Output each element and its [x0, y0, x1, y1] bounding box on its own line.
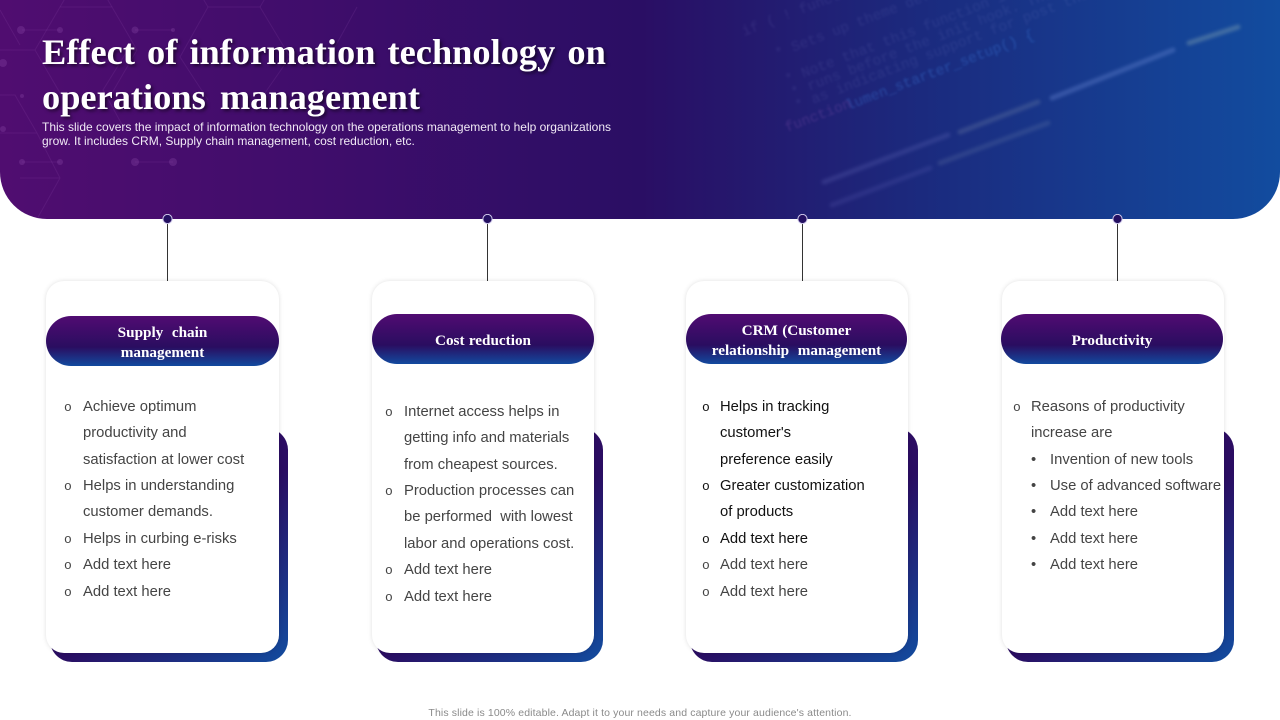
list: cost reduction points: Internet access helps in [404, 404, 559, 420]
list: productivity points: • [1031, 478, 1036, 494]
list: productivity points: Use of advanced software [1050, 478, 1221, 494]
list: supply chain points: o [64, 532, 72, 547]
blurred code backdrop [740, 0, 1242, 206]
heading: productivity: Productivity [1072, 332, 1152, 348]
list: cost reduction points: labor and operations cost. [404, 536, 574, 552]
list: cost reduction points [385, 404, 574, 605]
connector 3 [797, 214, 808, 281]
list: productivity points: Reasons of productivity [1031, 399, 1185, 415]
list: CRM points: Add text here [720, 557, 808, 573]
list: productivity points: Invention of new tools [1050, 452, 1193, 468]
panel: productivity [1000, 280, 1234, 662]
heading: CRM [686, 314, 907, 364]
title: Effect of information technology on [42, 32, 606, 72]
list: productivity points: • [1031, 452, 1036, 468]
list: CRM points: Greater customization [720, 478, 865, 494]
list: supply chain points: o [64, 558, 72, 573]
subtitle: This slide covers the impact of information technology on the operations management to help organizations [42, 120, 611, 134]
list: CRM points: o [702, 479, 710, 494]
list: productivity points: increase are [1031, 425, 1112, 441]
hexagon network pattern [0, 0, 357, 218]
heading: cost reduction [372, 314, 594, 364]
list: CRM points: o [702, 532, 710, 547]
list: supply chain points: o [64, 585, 72, 600]
list: cost reduction points: Production processes can [404, 483, 574, 499]
heading: CRM: relationship management [712, 342, 881, 358]
panel: CRM [684, 280, 918, 662]
panel: supply chain management [44, 280, 288, 662]
connector 2 [482, 214, 493, 281]
blurred code backdrop: function [783, 97, 854, 137]
heading: CRM: CRM (Customer [742, 322, 851, 338]
list: productivity points: o [1013, 400, 1021, 415]
list: productivity points: Add text here [1050, 531, 1138, 547]
list: CRM points: of products [720, 504, 793, 520]
list: CRM points: o [702, 585, 710, 600]
list: cost reduction points: o [385, 484, 393, 499]
list: supply chain points: Add text here [83, 557, 171, 573]
list: supply chain points: satisfaction at lower cost [83, 452, 244, 468]
list: CRM points: customer's [720, 425, 791, 441]
blurred code backdrop: lumen_starter_setup() { [844, 28, 1037, 115]
title: operations management [42, 77, 420, 117]
heading: supply chain management: Supply chain [118, 324, 207, 340]
list: cost reduction points: o [385, 405, 393, 420]
list: productivity points: • [1031, 531, 1036, 547]
title [42, 32, 608, 120]
list: supply chain points: productivity and [83, 425, 187, 441]
list: productivity points: Add text here [1050, 504, 1138, 520]
list: cost reduction points: o [385, 590, 393, 605]
list: CRM points: o [702, 400, 710, 415]
list: supply chain points: Achieve optimum [83, 399, 196, 415]
panel: cost reduction [370, 280, 603, 662]
list: CRM points: Add text here [720, 584, 808, 600]
list: productivity points: • [1031, 557, 1036, 573]
list: productivity points: • [1031, 504, 1036, 520]
list: CRM points: Helps in tracking [720, 399, 829, 415]
footer note: This slide is 100% editable. Adapt it to your needs and capture your audience's attention. [428, 707, 852, 719]
subtitle: grow. It includes CRM, Supply chain management, cost reduction, etc. [42, 134, 415, 148]
list: CRM points: o [702, 558, 710, 573]
list: supply chain points: Helps in curbing e-risks [83, 531, 237, 547]
list: supply chain points: customer demands. [83, 504, 213, 520]
heading: productivity [1001, 314, 1223, 364]
list: supply chain points [64, 399, 244, 600]
heading: supply chain management [46, 316, 279, 366]
connector 4 [1112, 214, 1123, 281]
list: supply chain points: o [64, 400, 72, 415]
list: cost reduction points: o [385, 563, 393, 578]
connector 1 [162, 214, 173, 281]
list: cost reduction points: be performed with lowest [404, 509, 573, 525]
list: supply chain points: Helps in understanding [83, 478, 234, 494]
list: CRM points: Add text here [720, 531, 808, 547]
list: cost reduction points: getting info and materials [404, 430, 569, 446]
list: supply chain points: Add text here [83, 584, 171, 600]
list: productivity points [1013, 399, 1221, 573]
list: CRM points [702, 399, 865, 600]
header banner [0, 0, 1280, 219]
list: cost reduction points: Add text here [404, 589, 492, 605]
list: cost reduction points: from cheapest sources. [404, 457, 558, 473]
heading: cost reduction: Cost reduction [435, 332, 531, 348]
list: productivity points: Add text here [1050, 557, 1138, 573]
list: supply chain points: o [64, 479, 72, 494]
heading: supply chain management: management [121, 344, 204, 360]
subtitle [42, 120, 611, 148]
list: CRM points: preference easily [720, 452, 833, 468]
list: cost reduction points: Add text here [404, 562, 492, 578]
